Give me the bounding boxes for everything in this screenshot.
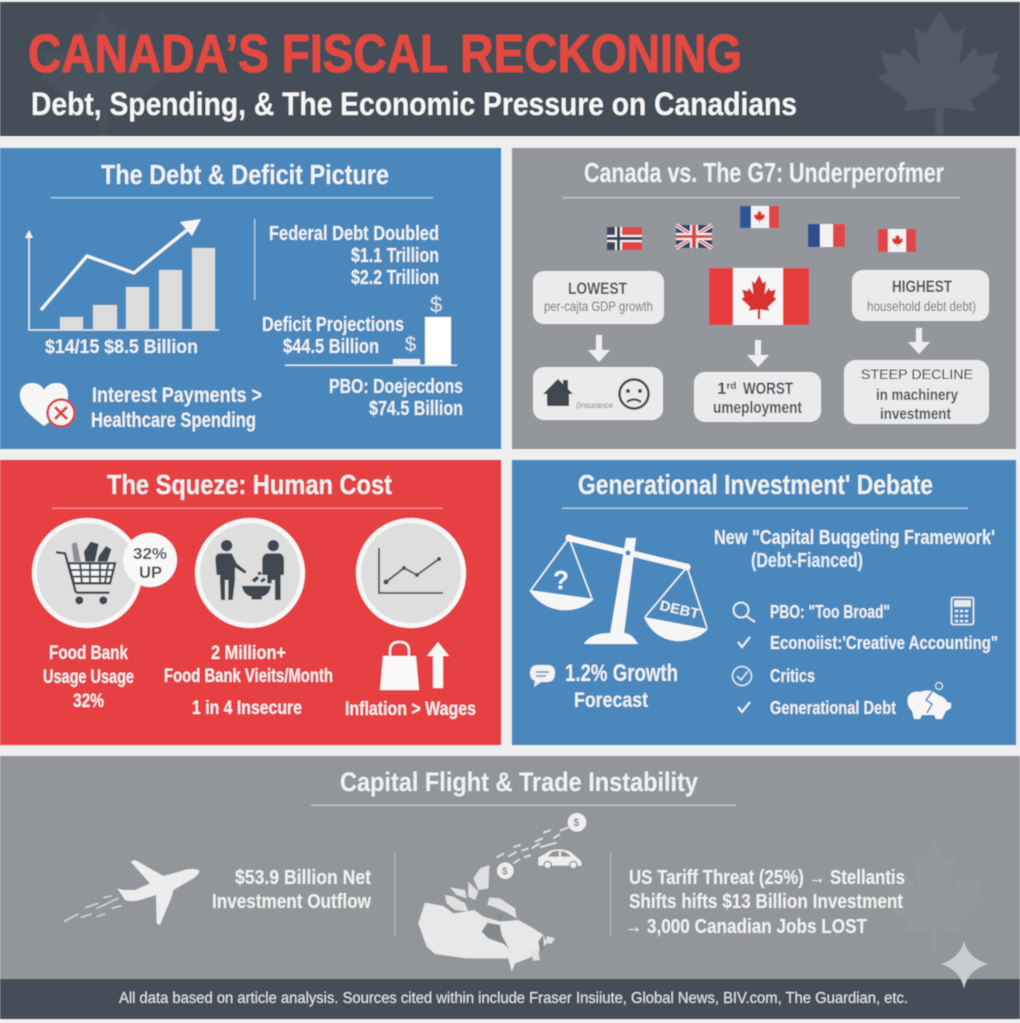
box: steep decline in machinery investment: STEEP DECLINE bbox=[861, 366, 973, 382]
icon: circled check bbox=[732, 666, 752, 686]
badge: 32 percent up: 32% bbox=[133, 546, 167, 563]
text: net investment outflow bbox=[212, 867, 371, 913]
text: net investment outflow: $53.9 Billion Net bbox=[235, 867, 371, 889]
icon: balance scale: DEBT bbox=[658, 597, 701, 622]
text: food bank usage: 32% bbox=[73, 691, 104, 712]
box: worst unemployment: 1 bbox=[717, 379, 726, 398]
flag: small Canada bbox=[878, 229, 916, 252]
heading: squeeze: The Squeze: Human Cost bbox=[107, 469, 392, 500]
text: capital budgeting framework bbox=[714, 527, 995, 572]
PBO projections text bbox=[329, 376, 463, 420]
panel: debt and deficit picture bbox=[0, 148, 501, 449]
heading: generational: Generational Investment' Debate bbox=[578, 469, 933, 500]
box: steep decline in machinery investment: in machinery bbox=[876, 387, 958, 404]
federal debt text bbox=[269, 223, 439, 289]
flag: United Kingdom bbox=[676, 225, 712, 248]
arrow: up bbox=[427, 642, 449, 688]
badge: 32 percent up bbox=[123, 533, 177, 587]
icon: shopping cart circle bbox=[34, 520, 140, 626]
box: housing and sad face: (Insurance bbox=[576, 401, 614, 410]
icon: check two bbox=[738, 702, 750, 712]
text: PBO too broad: PBO: "Too Broad" bbox=[770, 602, 890, 622]
flag: large Canada bbox=[709, 268, 809, 325]
chart: rising debt bars and trend arrow bbox=[25, 219, 219, 330]
text: tariff threat and lost jobs: US Tariff Threat (25%) → Stellantis bbox=[629, 867, 905, 889]
text: tariff threat and lost jobs: → 3,000 Canadian Jobs LOST bbox=[625, 916, 867, 938]
map: Canada with money and car: $ bbox=[502, 866, 508, 877]
icon: balance scale bbox=[529, 534, 708, 644]
deficit bars icon: $ bbox=[430, 292, 442, 317]
panel: generational investment debate bbox=[512, 460, 1016, 745]
text: growth forecast: 1.2% Growth bbox=[565, 660, 678, 687]
title: CANADA’S FISCAL RECKONING bbox=[28, 24, 742, 84]
text: growth forecast: Forecast bbox=[574, 689, 648, 712]
icon: speech bubble bbox=[530, 665, 555, 687]
icon: broken piggy bank bbox=[908, 682, 951, 719]
icon: calculator bbox=[952, 598, 974, 624]
icon: check one bbox=[738, 637, 750, 647]
icon: shopping bag bbox=[380, 642, 419, 690]
footer bar with sources bbox=[0, 979, 1020, 1019]
chart caption: $14/15 $8.5 Billion bbox=[45, 337, 198, 358]
PBO projections text: PBO: Doejecdons bbox=[329, 376, 463, 398]
panel: the squeeze, human cost bbox=[0, 460, 501, 745]
arrow: down centre bbox=[747, 340, 769, 367]
flag: Norway style bbox=[607, 227, 642, 250]
deficit projections text: Deficit Projections bbox=[262, 314, 404, 336]
box: lowest GDP growth: per-cajta GDP growth bbox=[544, 298, 653, 314]
subtitle: Debt, Spending, & The Economic Pressure on Canadians bbox=[31, 86, 797, 122]
box: highest household debt: household debt debt) bbox=[867, 298, 976, 314]
icon: airplane with trail bbox=[64, 860, 199, 925]
interest vs healthcare text: Healthcare Spending bbox=[91, 409, 256, 432]
badge: 32 percent up: UP bbox=[139, 563, 162, 582]
icon: people and food bowl circle bbox=[198, 520, 302, 626]
map: Canada with money and car bbox=[418, 813, 586, 972]
box: housing and sad face bbox=[533, 367, 663, 420]
box: worst unemployment bbox=[694, 372, 821, 422]
icon: magnifier bbox=[734, 602, 755, 622]
text: capital budgeting framework: (Debt-Fianced) bbox=[751, 550, 863, 572]
deficit projections text bbox=[262, 314, 404, 358]
text: tariff threat and lost jobs: Shifts hifts $13 Billion Investment bbox=[629, 891, 903, 913]
flag: France bbox=[808, 224, 845, 247]
PBO projections text: $74.5 Billion bbox=[369, 398, 463, 420]
icon: inflation line chart circle bbox=[358, 520, 464, 626]
box: lowest GDP growth: LOWEST bbox=[568, 279, 627, 298]
interest vs healthcare text: Interest Payments > bbox=[92, 384, 262, 407]
text: food bank visits: Food Bank Vieits/Month bbox=[164, 666, 333, 687]
text: food bank usage bbox=[43, 643, 134, 712]
arrow: down left bbox=[588, 335, 610, 362]
text: growth forecast bbox=[565, 660, 678, 712]
footer bar with sources: All data based on article analysis. Sources cited within include Fraser Insiiute, Global News, BIV.com, The Guardian, etc. bbox=[119, 990, 908, 1007]
box: steep decline in machinery investment: investment bbox=[880, 406, 952, 423]
text: food bank visits: 1 in 4 Insecure bbox=[192, 698, 302, 719]
box: lowest GDP growth bbox=[533, 271, 664, 324]
deficit bars icon bbox=[285, 292, 457, 366]
federal debt text: Federal Debt Doubled bbox=[269, 223, 439, 245]
text: generational debt: Generational Debt bbox=[770, 698, 896, 718]
panel: Canada vs the G7 bbox=[512, 148, 1016, 449]
text: food bank visits: 2 Million+ bbox=[211, 643, 286, 664]
box: highest household debt bbox=[852, 270, 989, 321]
deficit projections text: $44.5 Billion bbox=[283, 336, 379, 358]
heading: debt and deficit: The Debt & Deficit Picture bbox=[101, 159, 389, 190]
arrow: down right bbox=[908, 328, 930, 354]
text: food bank usage: Usage Usage bbox=[43, 667, 134, 688]
text: food bank visits bbox=[164, 643, 333, 719]
icon: balance scale: ? bbox=[553, 565, 569, 595]
federal debt text: $1.1 Trillion bbox=[351, 245, 439, 267]
text: inflation over wages: Inflation > Wages bbox=[345, 699, 476, 720]
deficit bars icon: $ bbox=[405, 334, 416, 356]
panel: capital flight and trade instability bbox=[0, 756, 1020, 980]
text: tariff threat and lost jobs bbox=[625, 867, 905, 938]
interest vs healthcare text bbox=[91, 384, 262, 432]
map: Canada with money and car: $ bbox=[573, 817, 579, 829]
flag: blue white red with leaf bbox=[740, 206, 779, 228]
box: worst unemployment: WORST bbox=[743, 379, 793, 398]
header banner bbox=[0, 2, 1020, 136]
federal debt text: $2.2 Trillion bbox=[351, 267, 439, 289]
box: steep decline in machinery investment bbox=[844, 360, 989, 424]
icon: heart with cross bbox=[20, 383, 74, 426]
heading: capital flight: Capital Flight & Trade Instability bbox=[340, 767, 698, 797]
text: net investment outflow: Investment Outflow bbox=[212, 891, 371, 913]
text: critics: Critics bbox=[770, 666, 815, 686]
box: highest household debt: HIGHEST bbox=[892, 277, 952, 296]
box: worst unemployment: umeployment bbox=[713, 398, 802, 417]
icon: sparkle bbox=[941, 941, 988, 988]
text: food bank usage: Food Bank bbox=[49, 643, 128, 664]
box: worst unemployment: rd bbox=[726, 381, 736, 392]
